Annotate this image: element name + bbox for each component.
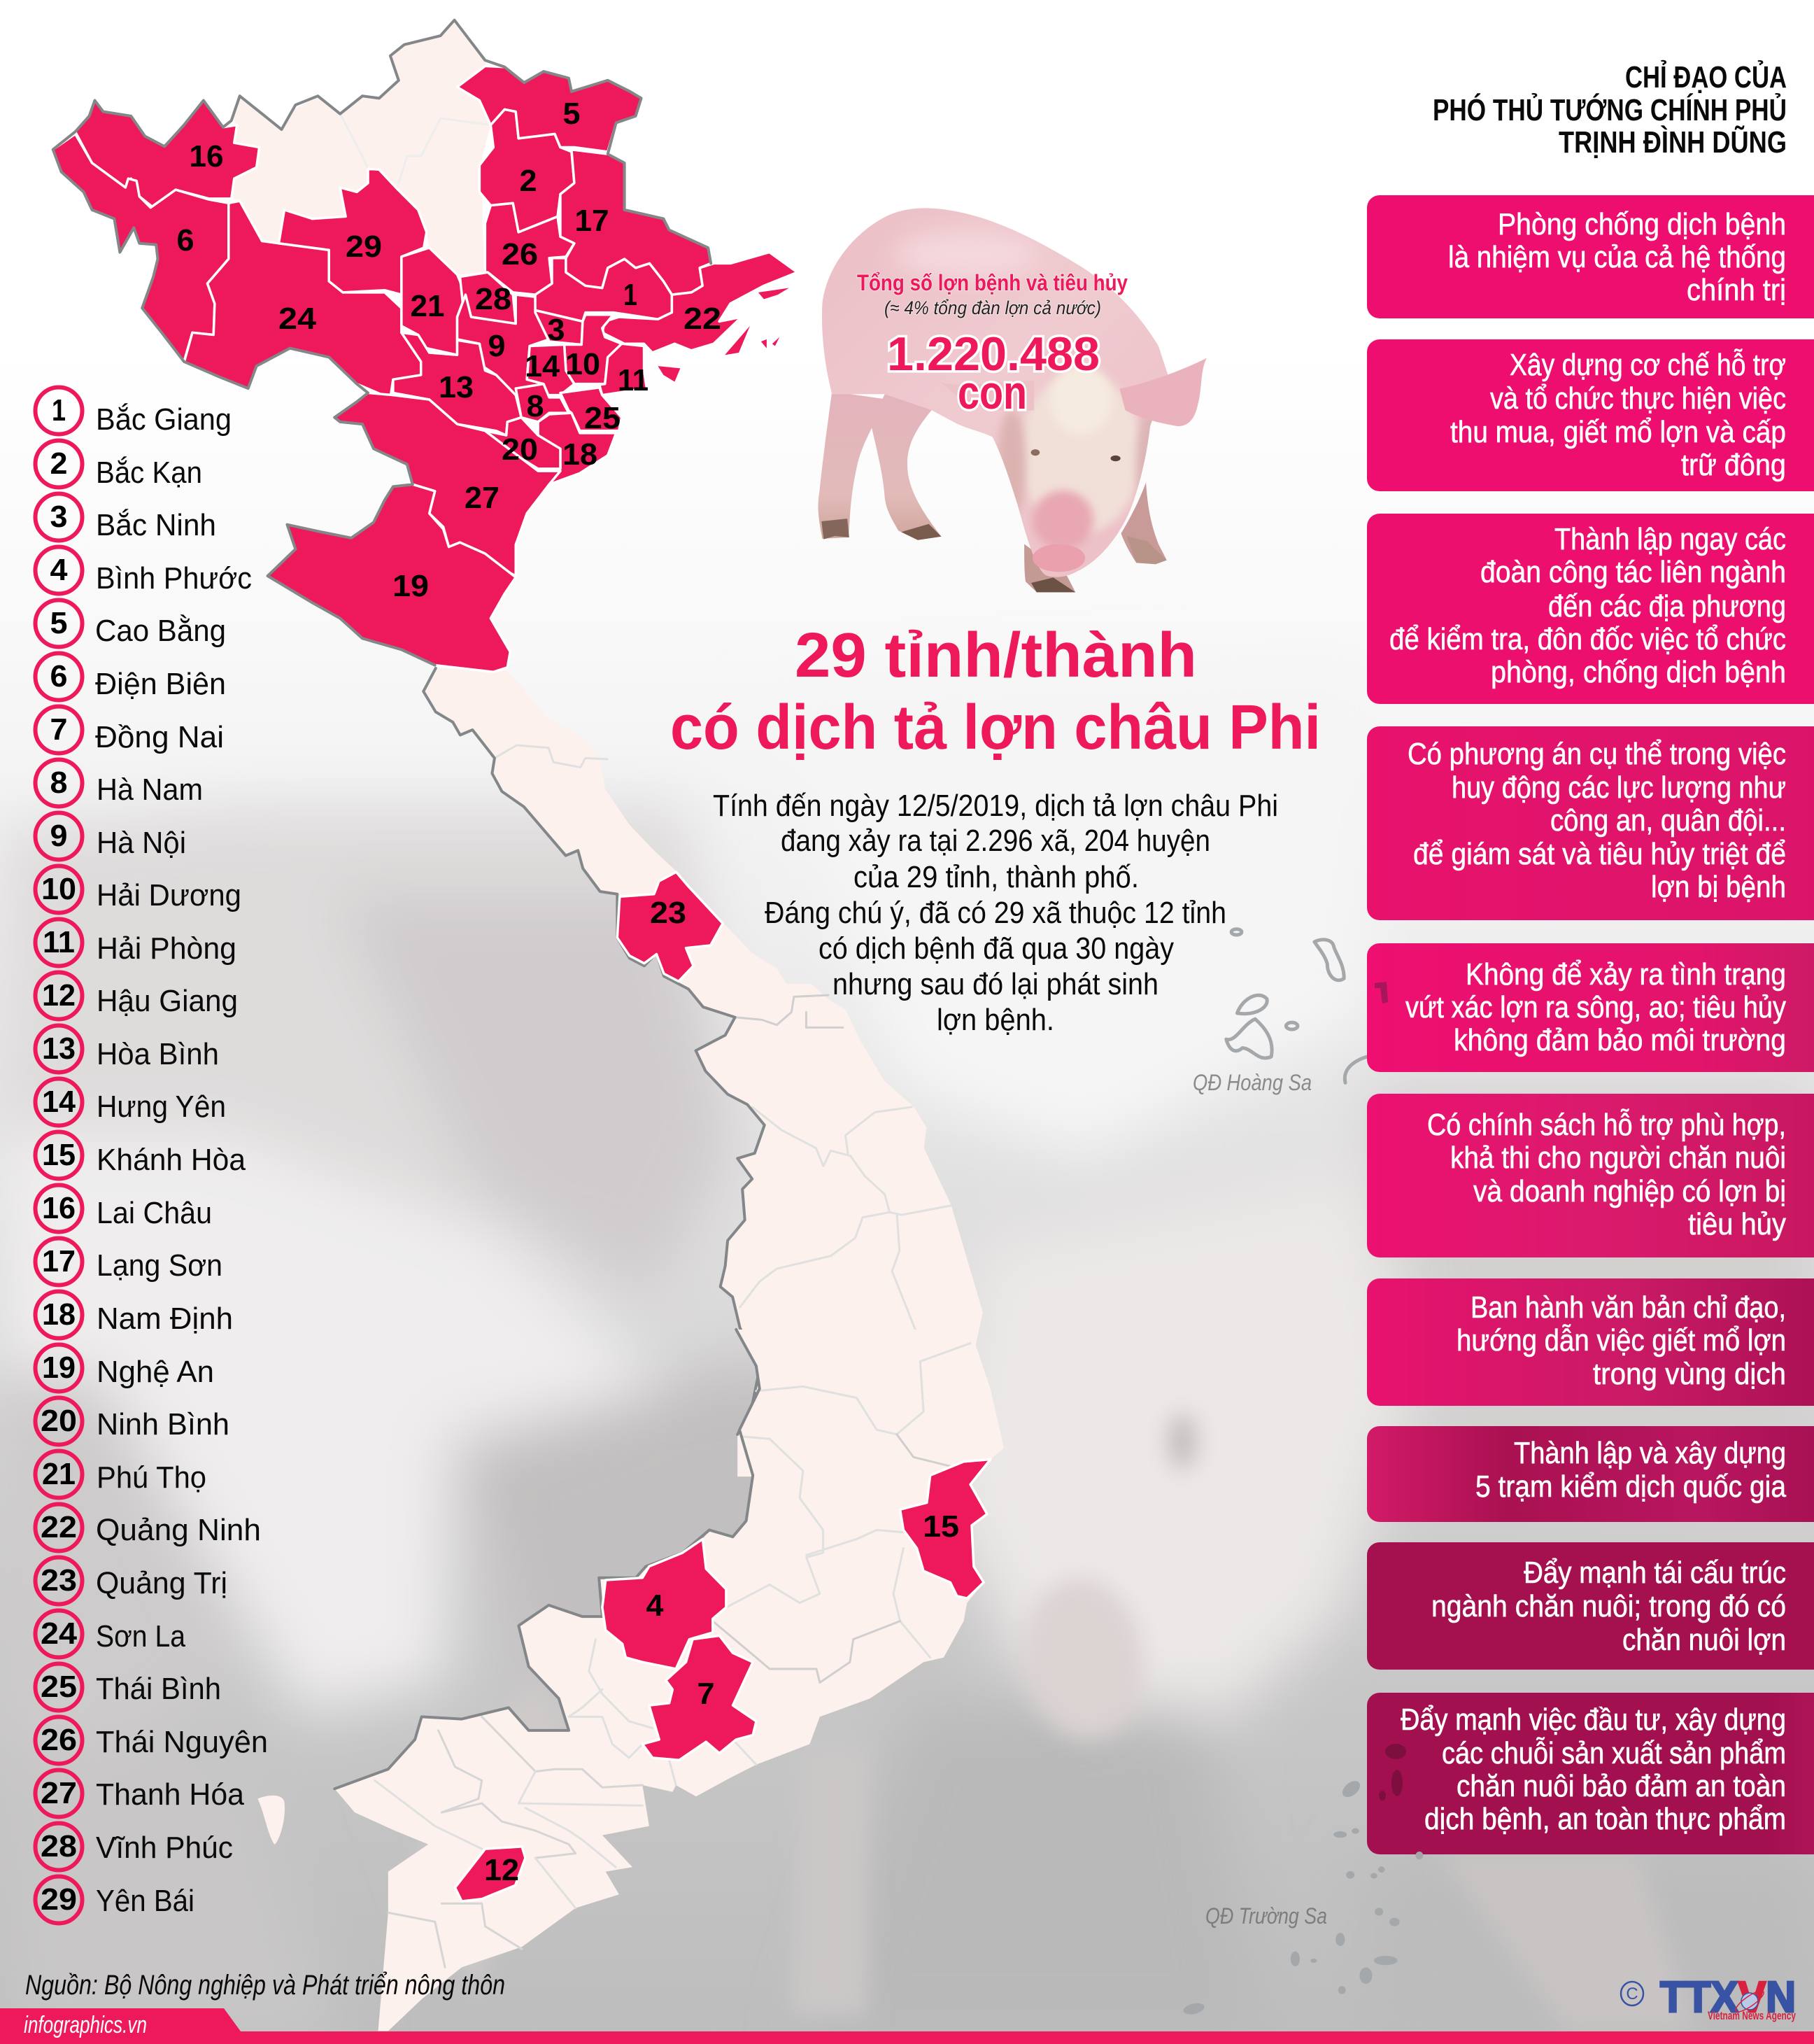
map province numbers: 15 — [923, 1509, 959, 1544]
province 8: Hà Nam — [516, 384, 569, 422]
legend row 9 — [35, 813, 186, 860]
legend row 1: Bắc Giang — [96, 402, 232, 437]
legend row 10 — [35, 866, 241, 912]
legend row 25: Thái Bình — [96, 1672, 221, 1706]
legend row 28: Vĩnh Phúc — [96, 1831, 233, 1865]
title — [670, 621, 1321, 763]
map province numbers: 16 — [189, 139, 224, 174]
legend row 21: Phú Thọ — [97, 1460, 206, 1495]
panel: directive 3: đoàn công tác liên ngành — [1480, 555, 1786, 589]
legend row 4: 4 — [50, 553, 68, 587]
callout unit: con — [958, 366, 1027, 419]
legend row 4: Bình Phước — [96, 561, 252, 595]
intro text block: đang xảy ra tại 2.296 xã, 204 huyện — [781, 824, 1210, 858]
panel: directive 3: phòng, chống dịch bệnh — [1491, 655, 1786, 689]
footer site name: infographics.vn — [24, 2012, 147, 2038]
map: central Vietnam — [423, 668, 988, 1476]
legend row 3 — [35, 494, 216, 542]
legend row 7 — [35, 707, 224, 754]
copyright mark — [1621, 1982, 1643, 2006]
legend row 27: Thanh Hóa — [96, 1777, 245, 1812]
province 5: Cao Bằng — [458, 66, 642, 152]
province 19: Nghệ An — [268, 484, 516, 672]
province 16: Lai Châu — [76, 101, 260, 208]
intro text block: Đáng chú ý, đã có 29 xã thuộc 12 tỉnh — [765, 896, 1226, 930]
province 28: Vĩnh Phúc — [460, 272, 516, 324]
panel: directive 7: trong vùng dịch — [1593, 1357, 1786, 1391]
legend row 27 — [35, 1770, 245, 1817]
map province numbers: 13 — [439, 370, 474, 404]
legend row 6 — [35, 654, 226, 701]
map province numbers: 27 — [465, 481, 499, 515]
province 18: Nam Định — [538, 413, 616, 484]
map province numbers: 26 — [502, 237, 538, 272]
panel: directive 6 — [1367, 1094, 1814, 1257]
legend row 5 — [35, 600, 226, 648]
legend row 16: Lai Châu — [97, 1196, 212, 1230]
pig snout — [1033, 544, 1085, 572]
legend row 18: Nam Định — [97, 1302, 233, 1336]
map province numbers: 12 — [484, 1853, 519, 1887]
legend row 16: 16 — [42, 1191, 76, 1225]
legend row 5: Cao Bằng — [95, 614, 226, 648]
province 6: Điện Biên — [53, 134, 229, 362]
legend row 1 — [35, 388, 232, 437]
affected southern and central provinces — [455, 872, 991, 1901]
title: có dịch tả lợn châu Phi — [670, 693, 1321, 763]
map province numbers: 21 — [410, 289, 445, 323]
province 4: Bình Phước — [602, 1539, 726, 1669]
legend row 22 — [35, 1504, 261, 1551]
legend row 2: Bắc Kạn — [96, 456, 202, 490]
map province numbers: 22 — [683, 302, 721, 336]
legend row 5: 5 — [50, 606, 67, 640]
panel: directive 10 — [1367, 1693, 1814, 1854]
globe — [1733, 1987, 1766, 2015]
legend row 18 — [35, 1292, 233, 1338]
province 29: Yên Bái — [278, 169, 427, 295]
island marks showing through panel 10 — [1379, 1744, 1406, 1800]
intro text block — [713, 789, 1278, 1037]
island mark showing through panel 5 — [1375, 982, 1388, 1003]
map: northern Vietnam provinces — [53, 20, 798, 672]
intro text block: Tính đến ngày 12/5/2019, dịch tả lợn châu Phi — [713, 789, 1278, 823]
legend row 7: 7 — [50, 712, 67, 747]
legend row 8: 8 — [50, 766, 67, 800]
province 17: Lạng Sơn — [560, 150, 711, 295]
panel: directive 2: trữ đông — [1681, 448, 1786, 482]
legend row 26 — [35, 1717, 268, 1763]
copyright mark: C — [1626, 1985, 1638, 2003]
source note: Nguồn: Bộ Nông nghiệp và Phát triển nông thôn — [25, 1970, 505, 2001]
Quảng Ninh islands — [658, 288, 789, 381]
pig stat callout — [857, 270, 1128, 419]
panel: directive 1: chính trị — [1687, 273, 1786, 307]
legend row 13: 13 — [42, 1031, 76, 1066]
map province numbers: 17 — [575, 204, 609, 238]
legend row 17 — [35, 1239, 222, 1285]
map province numbers: 1 — [623, 278, 637, 312]
legend row 18: 18 — [42, 1297, 76, 1332]
legend row 21 — [35, 1451, 206, 1497]
footer bar — [0, 2008, 1814, 2044]
panel: directive 1: Phòng chống dịch bệnh — [1498, 207, 1786, 241]
legend row 6: Điện Biên — [95, 667, 226, 701]
province 25: Thái Bình — [560, 388, 622, 431]
province 24: Sơn La — [184, 201, 421, 398]
legend row 29 — [35, 1877, 194, 1923]
title: 29 tỉnh/thành — [795, 621, 1197, 691]
province 3: Bắc Ninh — [535, 310, 583, 345]
map province numbers: 19 — [392, 569, 429, 603]
legend row 10: 10 — [41, 872, 76, 906]
callout title: Tổng số lợn bệnh và tiêu hủy — [857, 270, 1128, 295]
map province numbers: 8 — [526, 389, 544, 423]
legend row 23: Quảng Trị — [96, 1566, 227, 1600]
intro text block: có dịch bệnh đã qua 30 ngày — [819, 931, 1174, 966]
legend row 15: Khánh Hòa — [97, 1143, 246, 1177]
legend row 28: 28 — [41, 1829, 77, 1863]
legend row 8: Hà Nam — [97, 773, 203, 807]
province 10: Hải Dương — [565, 315, 622, 384]
callout subtitle: (≈ 4% tổng đàn lợn cả nước) — [884, 297, 1101, 318]
intro text block: lợn bệnh. — [937, 1003, 1054, 1037]
panel: directive 7 — [1367, 1278, 1814, 1406]
wordmark: TTXVN — [1660, 1973, 1796, 2022]
panel: directive 4: lợn bị bệnh — [1651, 870, 1786, 904]
legend row 24: 24 — [41, 1616, 78, 1651]
panel: directive 9 — [1367, 1542, 1814, 1670]
legend row 3: 3 — [50, 500, 67, 534]
pig illustration — [818, 208, 1207, 592]
map province numbers: 29 — [346, 230, 382, 264]
island: Phú Quốc — [257, 1796, 285, 1845]
panel: directive 4 — [1367, 726, 1814, 920]
map province numbers: 3 — [547, 313, 565, 347]
pig eyes — [1031, 449, 1121, 461]
province 26: Thái Nguyên — [485, 203, 574, 295]
legend row 22: 22 — [41, 1510, 77, 1544]
callout number: 1.220.488 — [887, 327, 1100, 381]
panel: directive 9: chăn nuôi lợn — [1622, 1623, 1786, 1657]
legend row 19: 19 — [42, 1351, 76, 1385]
legend row 9: Hà Nội — [97, 826, 186, 860]
land border — [53, 20, 711, 665]
legend row 11 — [35, 919, 236, 966]
legend row 13 — [35, 1026, 219, 1072]
legend row 29: Yên Bái — [96, 1884, 194, 1918]
map province numbers: 6 — [176, 223, 194, 258]
map province numbers — [176, 97, 959, 1887]
province 20: Ninh Bình — [485, 418, 560, 469]
province 15: Khánh Hòa — [900, 1460, 991, 1598]
pig shading — [895, 231, 1175, 549]
panel: directive 3 — [1367, 514, 1814, 704]
map province numbers: 10 — [565, 347, 600, 381]
hind legs — [818, 391, 887, 539]
legend row 28 — [35, 1824, 233, 1870]
map province numbers: 18 — [562, 437, 597, 472]
province 7: Đồng Nai — [642, 1635, 756, 1760]
legend row 20 — [35, 1398, 229, 1444]
intro text block: của 29 tỉnh, thành phố. — [853, 860, 1139, 894]
legend row 27: 27 — [41, 1776, 77, 1810]
legend row 15 — [35, 1132, 246, 1178]
legend row 17: Lạng Sơn — [97, 1248, 222, 1283]
map province numbers: 28 — [475, 282, 511, 316]
province 27: Thanh Hóa — [334, 393, 560, 576]
province 14: Hưng Yên — [527, 345, 574, 395]
legend row 16 — [35, 1185, 212, 1232]
logo: TTXVN — [1621, 1973, 1796, 2022]
legend row 4 — [35, 547, 252, 595]
map province numbers: 14 — [525, 349, 560, 383]
islands: Hoàng Sa archipelago — [1226, 929, 1371, 1083]
province legend list — [35, 388, 268, 1923]
map province numbers: 25 — [584, 401, 621, 435]
legend row 21: 21 — [42, 1457, 76, 1491]
legend row 23: 23 — [41, 1563, 77, 1598]
map province numbers: 24 — [278, 302, 317, 336]
map province numbers: 11 — [618, 363, 649, 397]
label: QĐ Hoàng Sa: QĐ Hoàng Sa — [1193, 1070, 1312, 1095]
legend row 14 — [35, 1079, 226, 1125]
legend row 22: Quảng Ninh — [96, 1513, 261, 1547]
legend row 12: 12 — [42, 978, 76, 1013]
body and head — [822, 208, 1168, 577]
legend row 12: Hậu Giang — [97, 984, 238, 1018]
islands: Trường Sa archipelago — [1179, 1779, 1423, 2017]
province 1: Bắc Giang — [535, 258, 672, 321]
legend row 14: Hưng Yên — [97, 1090, 226, 1124]
panel: directive 1 — [1367, 195, 1814, 318]
label: QĐ Trường Sa: QĐ Trường Sa — [1205, 1903, 1327, 1929]
legend row 15: 15 — [42, 1138, 76, 1172]
front leg — [1024, 544, 1075, 592]
panel: directive 5 — [1367, 943, 1814, 1072]
legend row 9: 9 — [50, 819, 67, 853]
legend row 13: Hòa Bình — [97, 1037, 219, 1071]
legend row 10: Hải Dương — [97, 878, 241, 912]
map of Vietnam — [53, 20, 1004, 2031]
map province numbers: 7 — [697, 1677, 715, 1711]
map province numbers: 5 — [562, 97, 581, 131]
panel: directive 6: tiêu hủy — [1688, 1207, 1786, 1241]
legend row 19: Nghệ An — [97, 1355, 214, 1389]
legend row 19 — [35, 1345, 214, 1391]
legend row 8 — [35, 760, 203, 807]
legend row 20: Ninh Bình — [97, 1407, 229, 1442]
far legs — [1121, 482, 1167, 564]
legend row 24 — [35, 1611, 185, 1657]
legend row 2: 2 — [50, 446, 67, 481]
province 13: Hòa Bình — [393, 332, 521, 435]
legend row 26: Thái Nguyên — [96, 1725, 268, 1759]
map province numbers: 2 — [519, 164, 537, 198]
legend row 25 — [35, 1664, 221, 1710]
legend row 1: 1 — [52, 393, 66, 428]
legend row 11: Hải Phòng — [97, 931, 236, 966]
map province numbers: 20 — [502, 432, 538, 467]
province 21: Phú Thọ — [402, 248, 465, 355]
map: southern Vietnam — [257, 1330, 1004, 2031]
unaffected northern provinces — [232, 20, 490, 274]
panel: directive 8 — [1367, 1426, 1814, 1522]
map province numbers: 23 — [650, 896, 686, 930]
heading: directive — [1433, 59, 1787, 160]
province 12: Hậu Giang — [455, 1847, 525, 1901]
legend row 6: 6 — [50, 659, 67, 693]
map province numbers: 4 — [646, 1588, 664, 1623]
legend row 7: Đồng Nai — [95, 720, 224, 754]
province 23: Quảng Trị — [617, 872, 723, 981]
legend row 24: Sơn La — [96, 1619, 185, 1654]
province 2: Bắc Kạn — [479, 109, 574, 232]
legend row 25: 25 — [41, 1670, 77, 1704]
province 11: Hải Phòng — [600, 344, 647, 395]
panel: directive 4: công an, quân đội... — [1550, 803, 1786, 838]
map province numbers: 9 — [488, 329, 505, 363]
legend row 20: 20 — [41, 1404, 77, 1438]
legend row 3: Bắc Ninh — [96, 508, 216, 542]
intro text block: nhưng sau đó lại phát sinh — [832, 967, 1158, 1001]
panel: directive 2 — [1367, 339, 1814, 491]
pig ears — [1120, 358, 1207, 426]
legend row 26: 26 — [41, 1723, 77, 1757]
province 22: Quảng Ninh — [602, 252, 798, 353]
legend row 23 — [35, 1558, 227, 1604]
legend row 12 — [35, 973, 238, 1019]
legend row 17: 17 — [42, 1244, 76, 1278]
province 9: Hà Nội — [458, 295, 549, 395]
legend row 2 — [35, 441, 202, 490]
legend row 11: 11 — [43, 925, 75, 959]
legend row 29: 29 — [41, 1882, 77, 1917]
legend row 14: 14 — [42, 1085, 76, 1119]
